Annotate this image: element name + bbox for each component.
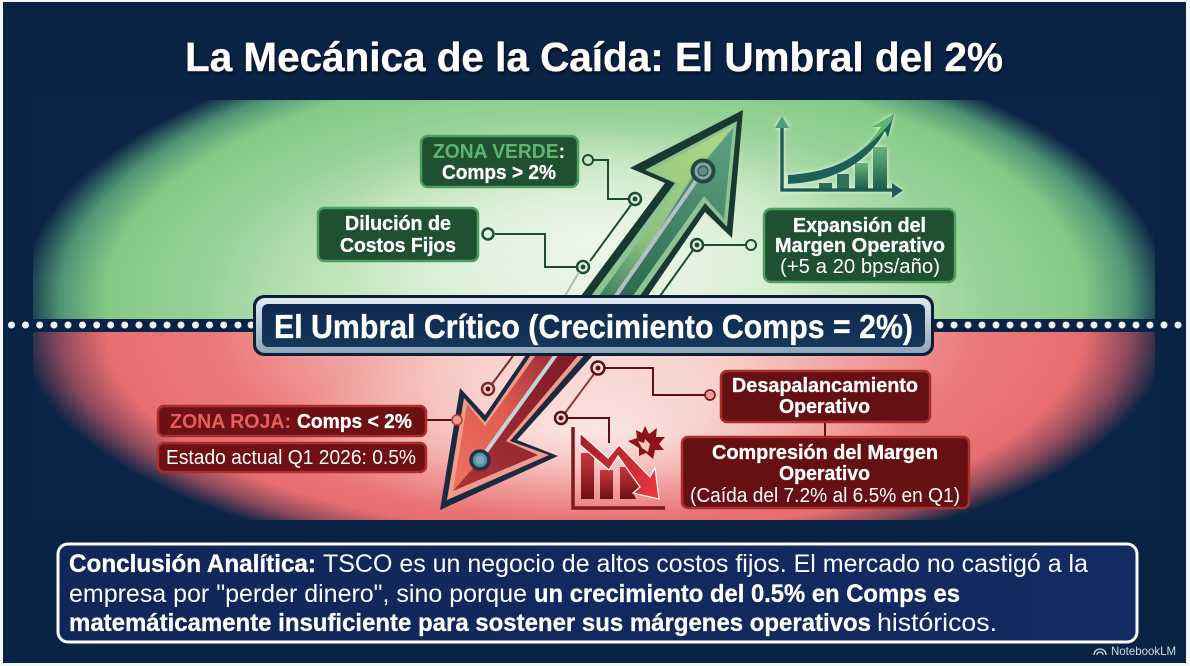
icon: rising bar chart xyxy=(775,114,903,198)
panel: analytical conclusion xyxy=(58,544,1137,642)
central threshold banner xyxy=(253,295,934,356)
panel: analytical conclusion: Conclusión Analítica: xyxy=(69,550,316,578)
label: compresión del margen operativo: Compresión del Margen xyxy=(712,442,938,464)
label: desapalancamiento operativo: Desapalancamiento xyxy=(732,375,918,397)
label: zona verde: ZONA VERDE: xyxy=(433,141,565,163)
label: desapalancamiento operativo: Operativo xyxy=(779,396,870,418)
label: zona roja xyxy=(158,406,426,436)
panel: analytical conclusion: TSCO es un negocio de altos costos fijos. El mercado no castigó a la xyxy=(323,550,1088,578)
label: zona verde xyxy=(421,136,578,187)
panel: analytical conclusion: empresa por "perder dinero", sino porque xyxy=(69,580,527,608)
panel: analytical conclusion: matemáticamente insuficiente para sostener sus márgenes operativos xyxy=(69,609,871,637)
green arrow going up xyxy=(578,110,743,300)
panel: green zone background xyxy=(33,100,1155,319)
label: expansión del margen operativo: Expansión del xyxy=(793,215,926,237)
green connector lines and nodes xyxy=(482,155,756,296)
label: zona roja: Comps < 2% xyxy=(297,411,412,433)
label: compresión del margen operativo: (Caída del 7.2% al 6.5% en Q1) xyxy=(690,485,960,507)
label: expansión del margen operativo: Margen Operativo xyxy=(775,235,945,257)
label: dilución de costos fijos xyxy=(318,208,478,261)
central threshold banner: El Umbral Crítico (Crecimiento Comps = 2%) xyxy=(274,308,913,345)
panel: analytical conclusion: históricos. xyxy=(877,609,997,637)
label: compresión del margen operativo xyxy=(682,437,969,508)
label: zona roja: ZONA ROJA: xyxy=(170,411,291,433)
panel: analytical conclusion: un crecimiento del 0.5% en Comps es xyxy=(534,580,960,608)
label: estado actual: Estado actual Q1 2026: 0.5% xyxy=(166,447,416,469)
label: dilución de costos fijos: Costos Fijos xyxy=(340,235,456,257)
label: dilución de costos fijos: Dilución de xyxy=(345,213,451,235)
title: La Mecánica de la Caída: El Umbral del 2% xyxy=(185,34,1003,80)
red arrow going down xyxy=(440,352,596,510)
icon: falling bar chart with burst xyxy=(573,426,665,508)
label: zona verde: Comps > 2% xyxy=(442,162,556,184)
label: desapalancamiento operativo xyxy=(721,371,930,422)
label: compresión del margen operativo: Operativo xyxy=(779,463,870,485)
label: expansión del margen operativo: (+5 a 20 bps/año) xyxy=(780,256,940,278)
threshold dotted line xyxy=(8,322,1182,328)
red connector lines and nodes xyxy=(426,356,825,443)
label: expansión del margen operativo xyxy=(764,209,955,282)
NotebookLM watermark: NotebookLM xyxy=(1111,644,1176,658)
panel: red zone background xyxy=(33,332,1155,520)
